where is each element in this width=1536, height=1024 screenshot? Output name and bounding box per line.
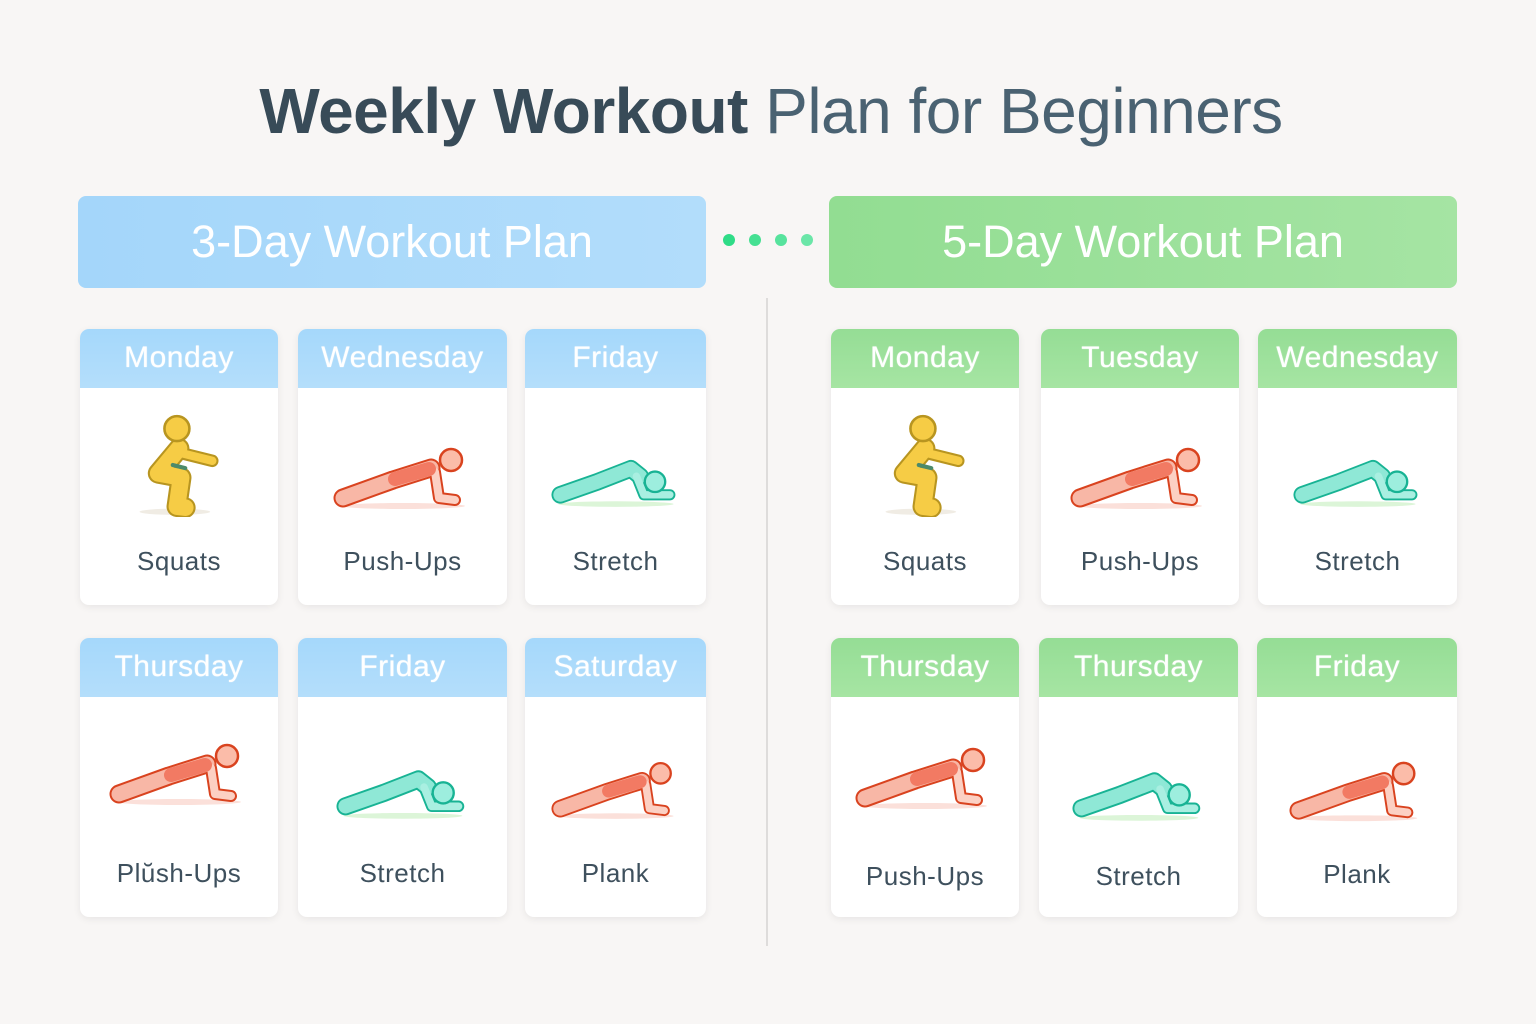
header: 3-day plan <box>78 196 706 288</box>
title: Weekly Workout Plan for Beginners <box>259 75 1283 147</box>
card: 3-day Monday squats <box>80 329 278 605</box>
card: 5-day Friday plank: Plank <box>1323 859 1391 889</box>
card: 3-day Monday squats: Squats <box>137 546 221 576</box>
header: 3-day plan: 3-Day Workout Plan <box>191 216 593 267</box>
card: 3-day Friday stretch <box>525 329 706 605</box>
card: 3-day Saturday plank: Plank <box>582 858 649 888</box>
card: 5-day Thursday push-ups <box>831 638 1019 917</box>
card: 5-day Wednesday stretch: Stretch <box>1315 546 1400 576</box>
connector dots <box>723 234 813 246</box>
card: 3-day Wednesday push-ups: Push-Ups <box>343 546 462 576</box>
card: 5-day Thursday stretch <box>1039 638 1238 917</box>
card: 5-day Thursday push-ups: Push-Ups <box>866 861 984 891</box>
card: 5-day Tuesday push-ups: Tuesday <box>1081 341 1199 374</box>
card: 3-day Monday squats: Monday <box>124 341 234 374</box>
card: 3-day Saturday plank <box>525 638 706 917</box>
card: 5-day Tuesday push-ups <box>1041 329 1239 605</box>
card: 3-day Friday stretch: Friday <box>359 650 446 683</box>
header: 5-day plan: 5-Day Workout Plan <box>942 216 1344 267</box>
card: 3-day Thursday push-ups: Thursday <box>114 650 244 683</box>
card: 5-day Tuesday push-ups: Push-Ups <box>1081 546 1199 576</box>
card: 5-day Monday squats: Squats <box>883 546 967 576</box>
card: 3-day Friday stretch: Friday <box>572 341 659 374</box>
card: 3-day Thursday push-ups <box>80 638 278 917</box>
card: 5-day Monday squats: Monday <box>870 341 980 374</box>
card: 3-day Thursday push-ups: Plŭsh-Ups <box>117 858 241 888</box>
card: 5-day Friday plank <box>1257 638 1457 917</box>
card: 3-day Friday stretch <box>298 638 507 917</box>
card: 5-day Thursday stretch: Thursday <box>1074 650 1203 683</box>
card: 5-day Wednesday stretch <box>1258 329 1457 605</box>
header: 5-day plan <box>829 196 1457 288</box>
card: 3-day Wednesday push-ups: Wednesday <box>321 341 484 374</box>
card: 5-day Friday plank: Friday <box>1314 650 1400 683</box>
card: 5-day Wednesday stretch: Wednesday <box>1276 341 1439 374</box>
card: 3-day Friday stretch: Stretch <box>573 546 658 576</box>
card: 3-day Friday stretch: Stretch <box>360 858 445 888</box>
card: 3-day Saturday plank: Saturday <box>553 650 678 683</box>
card: 3-day Wednesday push-ups <box>298 329 507 605</box>
card: 5-day Monday squats <box>831 329 1019 605</box>
card: 5-day Thursday stretch: Stretch <box>1096 861 1181 891</box>
card: 5-day Thursday push-ups: Thursday <box>860 650 990 683</box>
